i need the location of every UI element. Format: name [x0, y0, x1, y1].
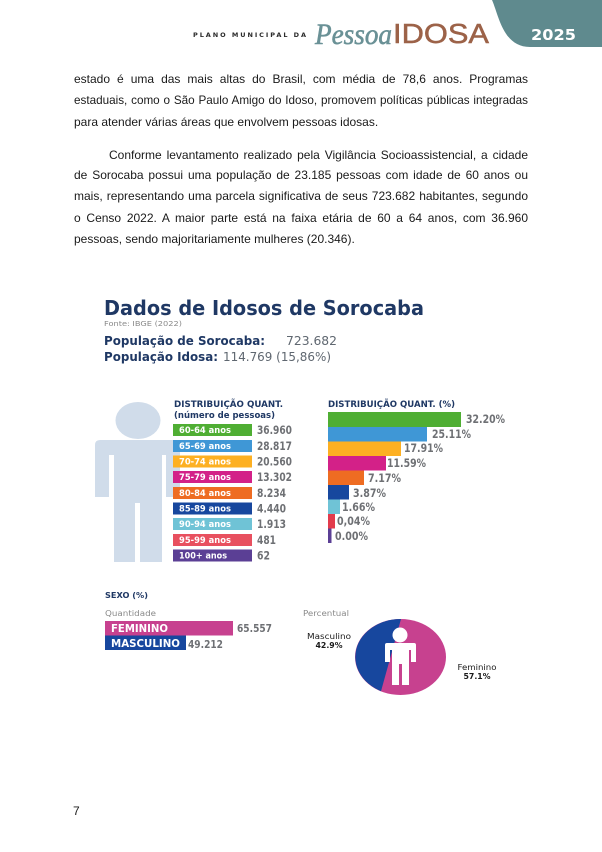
elderly population: 114.769 (15,86%)	[223, 349, 331, 364]
elderly population: População Idosa:	[104, 349, 218, 364]
age row 65-69: 65-69 anos	[179, 442, 231, 452]
pie label: male: Masculino	[307, 632, 351, 641]
age row 85-89	[173, 502, 286, 516]
age row 90-94: 90-94 anos	[179, 520, 231, 530]
paragraph two	[74, 148, 528, 246]
age row 65-69: 28.817	[257, 439, 292, 453]
age row 85-89: 85-89 anos	[179, 504, 231, 514]
age table	[173, 423, 292, 562]
percent bar chart: 1.66%	[342, 500, 375, 514]
percent bar chart: 25.11%	[432, 427, 471, 441]
icon: person silhouette	[95, 402, 180, 562]
percent bar chart: 0.00%	[335, 529, 368, 543]
page number: 7	[73, 804, 80, 818]
pie label: male: 42.9%	[316, 641, 342, 650]
age row 60-64	[173, 423, 292, 437]
bar: female: 65.557	[237, 622, 272, 635]
pie label: male	[307, 632, 351, 650]
age row 60-64: 60-64 anos	[179, 426, 231, 436]
paragraph one: estaduais, como o São Paulo Amigo do Idoso, promovem políticas públicas integradas	[74, 94, 528, 107]
age row 95-99: 95-99 anos	[179, 536, 231, 546]
logo: IDOSA: IDOSA	[393, 18, 489, 49]
paragraph two: pessoas, sendo majoritariamente mulheres (20.346).	[74, 232, 355, 246]
heading: sex: SEXO (%)	[105, 591, 148, 600]
paragraph two: o Censo 2022. A maior parte está na faixa etária de 60 a 64 anos, com 36.960	[74, 211, 528, 225]
header tab: teal corner	[492, 0, 602, 47]
age row 75-79	[173, 470, 292, 484]
paragraph one	[74, 72, 528, 129]
age row 75-79: 13.302	[257, 470, 292, 484]
age row 80-84	[173, 486, 286, 500]
population total: 723.682	[286, 333, 337, 348]
year: 2025	[531, 26, 576, 44]
bar: female	[105, 621, 272, 636]
pie label: female: 57.1%	[464, 672, 490, 681]
page header	[193, 0, 602, 51]
percent bar chart	[328, 412, 505, 543]
bar: male: 49.212	[188, 638, 223, 651]
percent bar chart: 3.87%	[353, 486, 386, 500]
paragraph one: para atender várias áreas que envolvem pessoas idosas.	[74, 115, 378, 129]
age row 90-94: 1.913	[257, 517, 286, 531]
age row 100+	[173, 548, 270, 562]
paragraph two: Conforme levantamento realizado pela Vigilância Socioassistencial, a cidade	[109, 148, 528, 162]
plan label: PLANO MUNICIPAL DA	[193, 31, 306, 39]
percent bar chart: 17.91%	[404, 441, 443, 455]
icon: person in pie	[385, 628, 416, 685]
label: percent: Percentual	[303, 609, 349, 618]
bar: female: FEMININO	[111, 622, 168, 635]
age row 70-74	[173, 454, 292, 468]
heading: quantity distribution: DISTRIBUIÇÃO QUANT.	[174, 399, 283, 410]
label: quantity: Quantidade	[105, 609, 156, 618]
age row 85-89: 4.440	[257, 502, 286, 516]
pie label: female: Feminino	[458, 663, 497, 672]
age row 60-64: 36.960	[257, 423, 292, 437]
heading: quantity distribution	[174, 399, 283, 421]
age row 65-69	[173, 439, 292, 453]
paragraph one: estado é uma das mais altas do Brasil, com média de 78,6 anos. Programas	[74, 72, 528, 86]
population total: População de Sorocaba:	[104, 333, 265, 348]
age row 75-79: 75-79 anos	[179, 473, 231, 483]
age row 80-84: 8.234	[257, 486, 286, 500]
age row 95-99: 481	[257, 533, 276, 547]
paragraph two: de Sorocaba possui uma população de 23.185 pessoas com idade de 60 anos ou	[74, 168, 528, 182]
age row 80-84: 80-84 anos	[179, 489, 231, 499]
age row 70-74: 70-74 anos	[179, 458, 231, 468]
elderly population	[104, 349, 331, 364]
age row 70-74: 20.560	[257, 454, 292, 468]
age row 100+: 62	[257, 548, 270, 562]
percent bar chart: 32.20%	[466, 412, 505, 426]
percent bar chart: 7.17%	[368, 471, 401, 485]
source: Fonte: IBGE (2022)	[104, 320, 182, 328]
paragraph two: mais, representando uma parcela significativa de seus 723.682 habitantes, segundo	[74, 189, 528, 203]
age row 100+: 100+ anos	[179, 552, 227, 562]
age row 90-94	[173, 517, 286, 531]
percent bar chart: 0,04%	[337, 514, 370, 528]
bar: male: MASCULINO	[111, 637, 180, 650]
bar: male	[105, 636, 223, 651]
age row 95-99	[173, 533, 276, 547]
heading: quantity distribution: (número de pessoas)	[174, 411, 275, 421]
pie chart	[355, 619, 446, 695]
logo: Pessoa: Pessoa	[314, 18, 392, 51]
pie label: female	[458, 663, 497, 681]
infographic title: Dados de Idosos de Sorocaba	[104, 296, 424, 320]
heading: percent distribution: DISTRIBUIÇÃO QUANT. (%)	[328, 399, 455, 410]
percent bar chart: 11.59%	[387, 456, 426, 470]
